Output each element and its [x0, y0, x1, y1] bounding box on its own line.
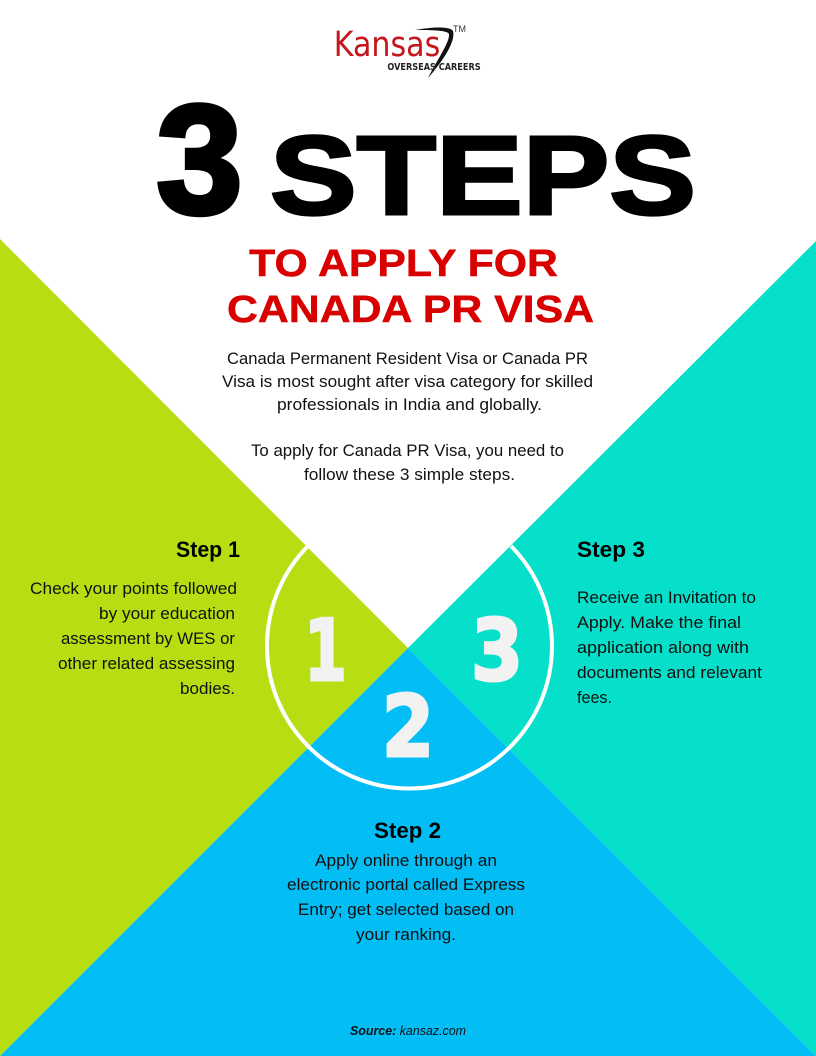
logo: OVERSEAS CAREERS — [387, 62, 481, 73]
step 1 text: other related assessing — [58, 655, 235, 673]
intro text: follow these 3 simple steps. — [304, 466, 515, 484]
panel: step 2 blue triangle — [0, 648, 816, 1056]
numeral 1: 1 — [304, 602, 347, 701]
intro text — [222, 350, 593, 484]
step 2 text: your ranking. — [356, 926, 456, 944]
step 2 text: Step 2 — [374, 818, 441, 843]
step 1 text: assessment by WES or — [61, 630, 235, 648]
step 1 text: bodies. — [180, 680, 235, 698]
step 1 text — [30, 537, 240, 698]
title: STEPS: STEPS — [270, 112, 696, 238]
intro text: Visa is most sought after visa category for skilled — [222, 373, 593, 391]
intro text: To apply for Canada PR Visa, you need to — [251, 442, 564, 460]
step 3 text: Step 3 — [577, 537, 645, 562]
step 3 text: Receive an Invitation to — [577, 589, 756, 607]
step 2 text: electronic portal called Express — [287, 876, 525, 894]
numeral 3: 3 — [471, 601, 523, 700]
title: big 3: 3 — [156, 73, 243, 246]
step 1 text: Step 1 — [176, 537, 240, 562]
subtitle: CANADA PR VISA — [227, 287, 594, 330]
logo: Kansas — [334, 24, 440, 65]
panel: step 3 teal triangle — [408, 241, 816, 1056]
step 2 text — [287, 818, 525, 944]
numeral 2: 2 — [382, 677, 434, 776]
step 3 text: Apply. Make the final — [577, 614, 741, 632]
logo — [334, 24, 481, 78]
source: Source: kansaz.com — [350, 1023, 466, 1038]
step 3 text — [577, 537, 762, 707]
step 2 text: Entry; get selected based on — [298, 901, 514, 919]
panel: step 1 green triangle — [0, 239, 408, 1056]
intro text: professionals in India and globally. — [277, 396, 542, 414]
step 3 text: fees. — [577, 689, 612, 707]
subtitle: TO APPLY FOR — [249, 241, 558, 284]
intro text: Canada Permanent Resident Visa or Canada PR — [227, 350, 588, 368]
step 1 text: Check your points followed — [30, 580, 237, 598]
subtitle — [227, 241, 594, 330]
step 2 text: Apply online through an — [315, 852, 497, 870]
step 3 text: application along with — [577, 639, 749, 657]
ring around the numbers — [267, 546, 552, 789]
logo: TM — [453, 24, 466, 34]
step 1 text: by your education — [99, 605, 235, 623]
step 3 text: documents and relevant — [577, 664, 762, 682]
